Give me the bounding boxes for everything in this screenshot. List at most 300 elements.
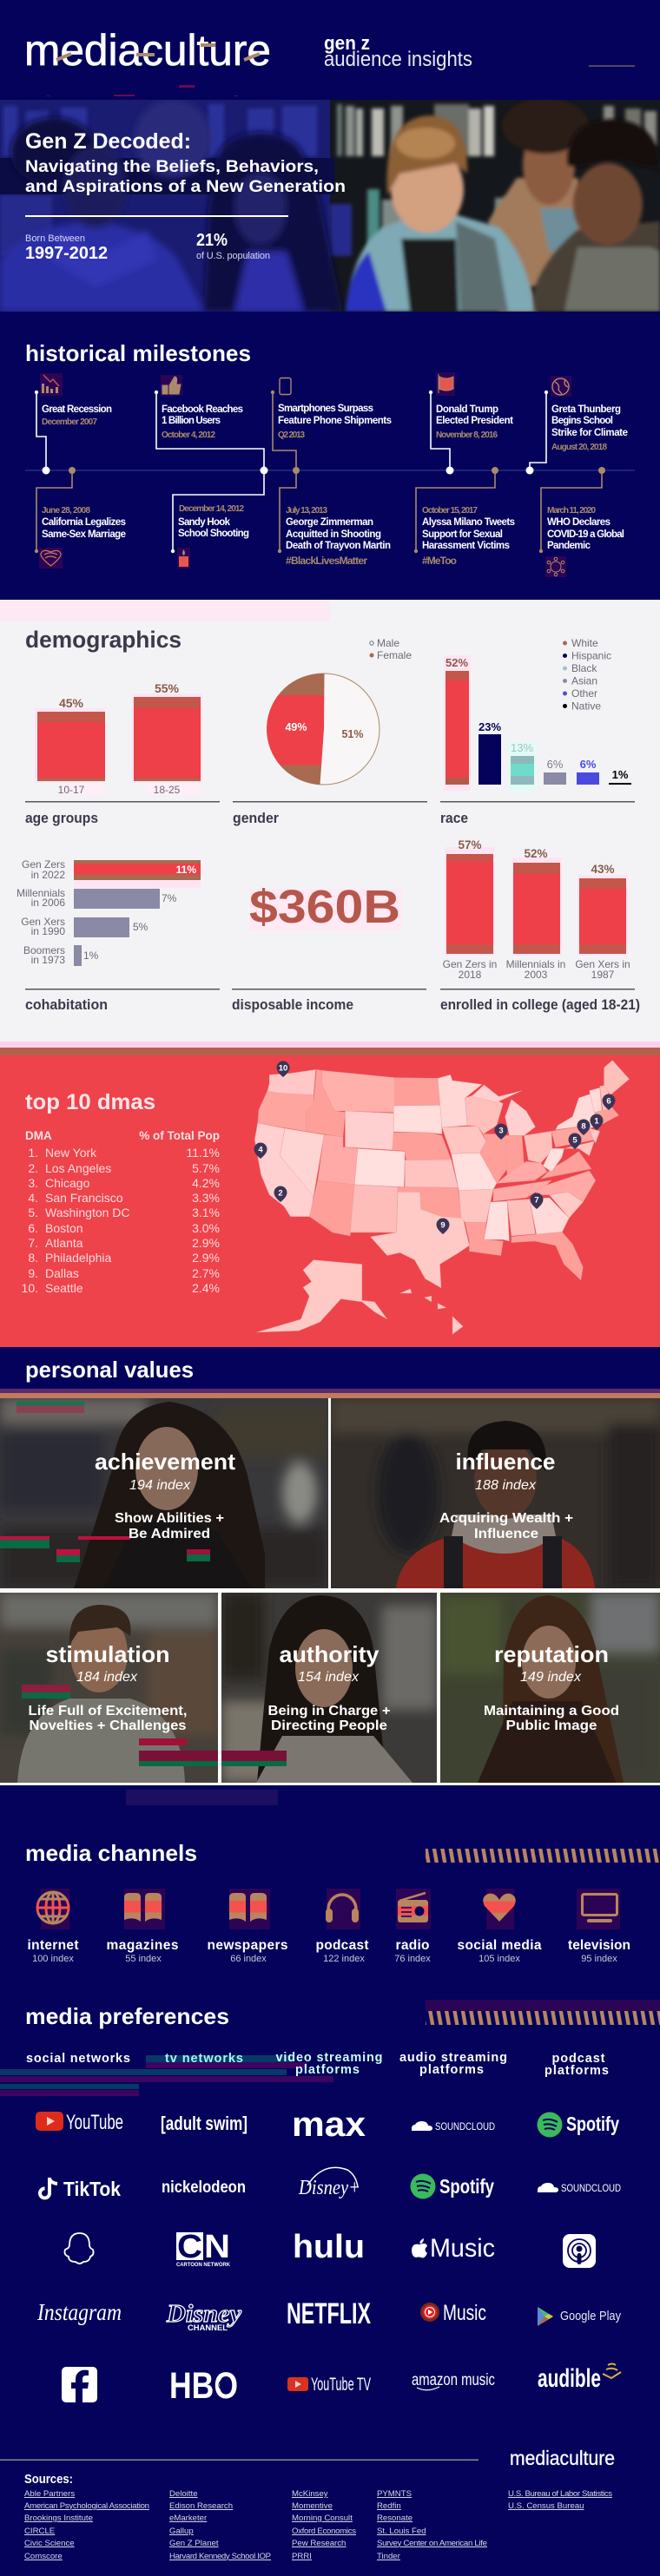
milestone labels below timeline: School Shooting [178,529,249,539]
milestone labels above timeline: Strike for Climate [551,428,628,438]
hero heading: Navigating the Beliefs, Behaviors, [25,158,319,176]
chart: age groups: 55% [155,681,180,695]
right shelves [337,104,657,250]
chart: cohabitation: 1% [83,950,99,962]
chart: race: 52% [446,656,468,669]
milestone labels below timeline: October 15, 2017 [422,506,478,516]
header title: gen z audience insights: audience insights [324,48,472,71]
map pins [254,1061,615,1234]
table: dma ranking: Washington DC [45,1206,130,1219]
left shelves [0,104,352,256]
card: authority: authority [280,1641,380,1667]
stat: disposable income: $360B [249,881,400,933]
sources list: U.S. Census Bureau [508,2501,584,2511]
milestone labels above timeline: November 8, 2016 [436,430,498,440]
table: dma ranking: 6. [28,1221,38,1235]
table: dma ranking: 2. [28,1161,38,1175]
logo: Instagram: Instagram [36,2299,122,2325]
chart: cohabitation: 7% [162,892,177,904]
sources list: American Psychological Association [24,2501,149,2511]
card: stimulation [0,1593,218,1783]
legend: race [563,637,611,712]
chart: enrolled in college: 1987 [591,969,615,981]
table: dma ranking: 2.4% [192,1281,220,1295]
card: reputation: 149 index [520,1670,582,1685]
milestone labels above timeline: Smartphones Surpass [278,404,373,414]
table: dma ranking: 7. [28,1236,38,1250]
milestone labels above timeline: Donald Trump [436,404,498,415]
logo: adult swim: [adult swim] [161,2113,248,2134]
chart: age groups [35,681,202,796]
milestone labels below timeline: Pandemic [547,541,591,551]
card: influence [331,1398,660,1588]
card: authority: 154 index [298,1670,360,1685]
chart: enrolled in college: Gen Zers in [443,958,497,970]
chart: cohabitation: Millennials [16,887,65,899]
chart: race: 13% [511,741,533,754]
logo: Google Play: Google Play [560,2309,621,2323]
back boy [488,98,599,312]
legend: race: Hispanic [571,649,611,661]
table: dma ranking: 3.1% [192,1206,220,1219]
column headings: social networks [26,2052,130,2066]
milestone labels below timeline: #MeToo [422,555,457,567]
channel: television [568,1894,630,1964]
table: dma ranking: % of Total Pop [139,1129,220,1142]
logo: YouTube TV: YouTube TV [311,2375,371,2395]
table: dma ranking: 2.9% [192,1236,220,1250]
sources list: Oxford Economics [292,2527,356,2536]
card: influence: 188 index [475,1478,537,1493]
chart: enrolled in college: 2003 [525,969,548,981]
table: dma ranking: 3.3% [192,1191,220,1205]
card: influence: influence [455,1449,556,1475]
map pins: 9 [440,1220,446,1231]
milestone labels above timeline: December 2007 [42,417,97,427]
card: achievement: Be Admired [129,1527,210,1541]
milestone labels above timeline: Elected President [436,416,513,426]
logo: max: max [292,2106,366,2144]
table: dma ranking [22,1129,220,1295]
logo: SoundCloud podcast [538,2182,621,2194]
chart: enrolled in college: 2018 [459,969,482,981]
header title: gen z audience insights: gen z [324,32,370,54]
legend: race: Black [571,662,597,674]
chart: cohabitation: 5% [133,921,148,933]
heading: media channels: media channels [25,1840,197,1866]
logo: TikTok: TikTok [63,2178,121,2200]
chart: cohabitation: Gen Xers [21,916,65,928]
front right boy [531,119,660,312]
milestone labels below timeline: Same-Sex Marriage [42,529,126,540]
subheading: race: race [440,811,468,826]
milestone labels above timeline: October 4, 2012 [162,430,215,440]
sources list: Survey Center on American Life [377,2539,487,2548]
milestone labels below timeline: December 14, 2012 [179,504,244,514]
channel: radio [394,1893,431,1964]
channel: magazines: 55 index [125,1954,162,1964]
icon: heart [41,550,61,566]
logo: Apple Music: Music [430,2234,495,2263]
heading: demographics: demographics [25,627,182,653]
logo: audible: audible [538,2364,601,2393]
header title: gen z audience insights [324,32,472,71]
logo: Disney+: Disney+ [298,2177,360,2199]
chart: age groups: 10-17 [58,784,85,796]
channel: internet: 100 index [32,1954,74,1964]
channel: internet: internet [28,1938,78,1953]
card: influence: Influence [474,1527,538,1541]
subheading: cohabitation: cohabitation [25,997,108,1013]
channel: magazines [106,1893,179,1964]
table: dma ranking: 10. [22,1281,38,1295]
milestone labels below timeline: Sandy Hook [178,517,231,528]
sources list: St. Louis Fed [377,2527,426,2536]
logo: SoundCloud podcast: SOUNDCLOUD [561,2182,621,2194]
sources list: Tinder [377,2552,401,2561]
table: dma ranking: DMA [25,1129,52,1142]
table: dma ranking: New York [45,1146,97,1160]
logo: YouTube TV [287,2375,371,2395]
logo: HBO: HBO [169,2365,238,2407]
panel: historical milestones [25,340,635,577]
milestone labels below timeline: Harassment Victims [422,541,510,551]
stat: born between [26,234,108,259]
sources list: Morning Consult [292,2514,353,2523]
logo: YouTube: YouTube [66,2111,123,2134]
milestone labels above timeline: Begins School [551,416,613,426]
sources list: Edison Research [169,2501,233,2511]
chart: gender pie: 49% [285,721,307,733]
table: dma ranking: 2.7% [192,1266,220,1280]
milestone labels below timeline: Acquitted in Shooting [286,529,381,540]
map pins: 5 [572,1135,578,1146]
logo: TikTok [40,2178,121,2200]
logo: Spotify audio [410,2173,494,2199]
panel: personal values [0,1347,660,1785]
chart: enrolled in college: 43% [591,863,615,876]
chart: race [444,655,631,791]
table: dma ranking: 9. [28,1266,38,1280]
chart: race: 23% [478,720,501,733]
stat: born between: 1997-2012 [25,244,108,263]
table: dma ranking: 1. [28,1146,38,1160]
sources heading: Sources: [24,2472,73,2487]
milestone labels below timeline: June 28, 2008 [42,506,90,516]
sources list: Momentive [292,2501,333,2511]
milestone labels below timeline: Support for Sexual [422,529,503,540]
milestone labels above timeline: Q2 2013 [278,430,305,440]
us map [254,1061,630,1334]
logo: Snapchat [64,2233,94,2264]
logo: mediaculture: mediaculture [24,26,271,75]
table: dma ranking: 4. [28,1191,38,1205]
icon: thumbs up [162,377,181,394]
logo: Disney Channel: Disney [166,2301,242,2328]
timeline dots [35,391,605,553]
milestone labels above timeline: Facebook Reaches [162,404,243,415]
sources list: Able Partners [24,2489,75,2499]
logo: nickelodeon: nickelodeon [162,2178,246,2197]
footer logo: mediaculture [510,2447,615,2469]
sources list: Brookings Institute [24,2514,93,2523]
logo: Cartoon Network: N [204,2229,230,2265]
map pins: 4 [258,1146,263,1154]
milestone labels above timeline: August 20, 2018 [551,443,607,452]
sources list: Pew Research [292,2539,346,2548]
icon: virus [547,557,564,576]
logo: Google Play [538,2307,621,2326]
chart: age groups: 18-25 [154,784,181,796]
sources list: Comscore [24,2552,63,2561]
chart: race: 6% [580,758,597,771]
logo: Facebook [62,2367,97,2402]
table: dma ranking: 5. [28,1206,38,1219]
icon: flag [439,374,453,393]
chart: enrolled in college: Millennials in [506,958,565,970]
milestone labels above timeline: Greta Thunberg [551,404,621,415]
logo: Netflix: NETFLIX [287,2297,371,2330]
milestone labels below timeline: COVID-19 a Global [547,529,624,540]
milestone labels below timeline: George Zimmerman [286,517,373,528]
chart: race: 6% [547,758,564,771]
table: dma ranking: 3. [28,1176,38,1190]
sources list: Gallup [169,2527,194,2536]
sources list: Harvard Kennedy School IOP [169,2552,271,2561]
sources list [24,2489,612,2561]
channel: social media: social media [457,1938,542,1953]
column headings [26,2051,609,2078]
column headings: tv networks [165,2052,243,2066]
channel: social media: 105 index [478,1954,520,1964]
milestone labels below timeline: WHO Declares [547,517,610,528]
subheading: enrolled in college: enrolled in college (aged 18-21) [440,997,640,1013]
logo: Cartoon Network: C [177,2229,202,2265]
card: achievement: Show Abilities + [115,1511,224,1526]
icon: globe [552,378,569,395]
card: stimulation: Novelties + Challenges [30,1718,187,1733]
column headings: platforms [544,2064,609,2078]
table: dma ranking: 11.1% [186,1146,220,1160]
logo: Apple Podcasts [563,2234,596,2268]
card: influence: Acquiring Wealth + [439,1511,573,1526]
channel: radio: 76 index [394,1954,431,1964]
milestone labels below timeline: July 13, 2013 [286,506,327,516]
channel: social media [457,1894,542,1964]
footer [0,2447,615,2561]
channel: television: 95 index [581,1954,617,1964]
chart: cohabitation: in 1973 [31,954,65,966]
logo: Disney Channel: CHANNEL [188,2323,228,2332]
subheading: disposable income: disposable income [232,997,353,1013]
sources list: eMarketer [169,2514,208,2523]
channel: television: television [568,1938,630,1953]
legend: race: Other [571,687,597,700]
chart: age groups: 45% [59,696,84,710]
milestone labels above timeline: 1 Billion Users [162,416,221,426]
heading: historical milestones: historical milestones [25,340,251,366]
heading: media preferences: media preferences [25,2003,229,2029]
column headings: platforms [295,2063,360,2077]
sources list: CIRCLE [24,2527,55,2536]
logo: Spotify audio: Spotify [439,2175,494,2198]
sources list: Deloitte [169,2489,198,2499]
logo: hulu: hulu [293,2229,365,2265]
milestone labels below timeline [42,504,624,567]
card: authority [221,1593,437,1783]
logo: SoundCloud: SOUNDCLOUD [435,2120,495,2132]
panel: top 10 dmas [0,1048,660,1347]
table: dma ranking: 5.7% [192,1161,220,1175]
channel: newspapers: newspapers [207,1938,288,1953]
chart: gender pie [267,637,412,785]
sources list: PRRI [292,2552,312,2561]
table: dma ranking: Seattle [45,1281,83,1295]
channel: newspapers: 66 index [230,1954,267,1964]
table: dma ranking: Chicago [45,1176,90,1190]
chart: enrolled in college: 52% [524,847,548,860]
chart: cohabitation: in 2006 [31,897,65,909]
card: reputation [440,1593,660,1783]
logo: Cartoon Network: CARTOON NETWORK [176,2262,230,2268]
card: stimulation: stimulation [45,1641,170,1667]
sources list: McKinsey [292,2489,328,2499]
table: dma ranking: San Francisco [45,1191,123,1205]
milestone labels above timeline: Feature Phone Shipments [278,416,392,426]
hero heading: and Aspirations of a New Generation [25,178,346,196]
table: dma ranking: Dallas [45,1266,79,1280]
heading: top 10 dmas: top 10 dmas [25,1090,155,1114]
channel: podcast: podcast [316,1938,368,1953]
chart: cohabitation [16,858,201,966]
chart: enrolled in college: Gen Xers in [575,958,630,970]
table: dma ranking: Los Angeles [45,1161,111,1175]
card: stimulation: 184 index [76,1670,138,1685]
channel: radio: radio [396,1938,429,1953]
milestone labels above timeline [42,404,628,452]
subheading: age groups: age groups [25,811,98,826]
milestone labels below timeline: March 11, 2020 [547,506,596,516]
chart: cohabitation: in 1990 [31,925,65,937]
card: authority: Being in Charge + [267,1704,391,1718]
logo: Disney+ [298,2167,360,2199]
channel: podcast [316,1895,368,1964]
stat: born between: Born Between [25,233,85,244]
channel: magazines: magazines [106,1938,179,1953]
hero heading [25,129,346,196]
logo: Spotify [537,2113,619,2137]
sources list: Gen Z Planet [169,2539,219,2548]
main boy [346,115,534,312]
sources list: Civic Science [24,2539,75,2548]
milestone labels below timeline: Death of Trayvon Martin [286,541,391,551]
sources list: Resonate [377,2514,412,2523]
panel: media preferences [0,2000,660,2407]
channel: internet [28,1892,78,1964]
legend: race: Asian [571,675,597,687]
sources list: U.S. Bureau of Labor Statistics [508,2489,612,2499]
panel: demographics [0,600,660,1048]
chart: cohabitation: in 2022 [31,869,65,881]
logo: Spotify: Spotify [566,2113,619,2135]
sources list: PYMNTS [377,2489,412,2499]
icon: declining chart [42,375,59,393]
card: stimulation: Life Full of Excitement, [28,1704,188,1718]
hero panel [0,98,660,312]
legend: race: Native [571,700,601,712]
logo: YouTube Music: Music [443,2301,486,2325]
logo: SoundCloud [412,2120,495,2132]
stat: 21 percent [196,233,269,260]
chart: cohabitation: Gen Zers [22,858,65,871]
map pins: 7 [534,1196,539,1205]
chart: cohabitation: Boomers [23,944,65,956]
logo: YouTube Music [420,2301,486,2325]
card: reputation: Public Image [505,1718,597,1733]
icon: candle [179,549,188,567]
map pins: 3 [498,1127,504,1135]
column headings: video streaming [276,2051,382,2065]
card: reputation: reputation [494,1641,609,1667]
table: dma ranking: 4.2% [192,1176,220,1190]
column headings: platforms [419,2063,484,2077]
map pins: 8 [581,1121,586,1132]
icon: smartphone [280,378,291,394]
map pins: 2 [278,1189,283,1198]
table: dma ranking: Boston [45,1221,83,1235]
milestone labels below timeline: #BlackLivesMatter [286,555,367,567]
table: dma ranking: Atlanta [45,1236,83,1250]
subheading: gender: gender [233,811,280,826]
card: achievement [0,1398,328,1588]
column headings: podcast [552,2052,605,2066]
chart: cohabitation: 11% [176,864,196,876]
channel: podcast: 122 index [323,1954,365,1964]
stat: 21 percent: 21% [196,231,228,250]
map pins: 1 [594,1116,599,1127]
hero heading: Gen Z Decoded: [25,129,191,154]
card: achievement: 194 index [129,1478,191,1493]
logo: Cartoon Network [176,2229,230,2268]
chart: race: 1% [612,768,629,781]
stat: 21 percent: of U.S. population [196,251,270,261]
chart: gender pie: 51% [341,728,364,740]
heading: personal values: personal values [25,1357,194,1383]
timeline connectors [36,392,602,551]
map pins: 10 [279,1064,287,1073]
left silhouettes [0,100,343,312]
table: dma ranking: 8. [28,1251,38,1265]
legend: race: White [571,637,598,649]
table: dma ranking: 2.9% [192,1251,220,1265]
table: dma ranking: 3.0% [192,1221,220,1235]
milestone labels below timeline: California Legalizes [42,517,126,528]
card: achievement: achievement [95,1449,235,1475]
logo: amazon music: amazon music [412,2371,495,2389]
map pins: 6 [606,1097,611,1106]
chart: enrolled in college: 57% [458,838,482,851]
sources list: Redfin [377,2501,401,2511]
column headings: audio streaming [399,2051,507,2065]
chart: gender pie: Male [377,637,399,649]
table: dma ranking: Philadelphia [45,1251,111,1265]
card: reputation: Maintaining a Good [484,1704,619,1718]
chart: enrolled in college [443,838,630,981]
milestone labels below timeline: Alyssa Milano Tweets [422,517,515,528]
panel: media channels [25,1790,660,1964]
milestone labels above timeline: Great Recession [42,404,112,415]
logo: YouTube [36,2111,123,2134]
